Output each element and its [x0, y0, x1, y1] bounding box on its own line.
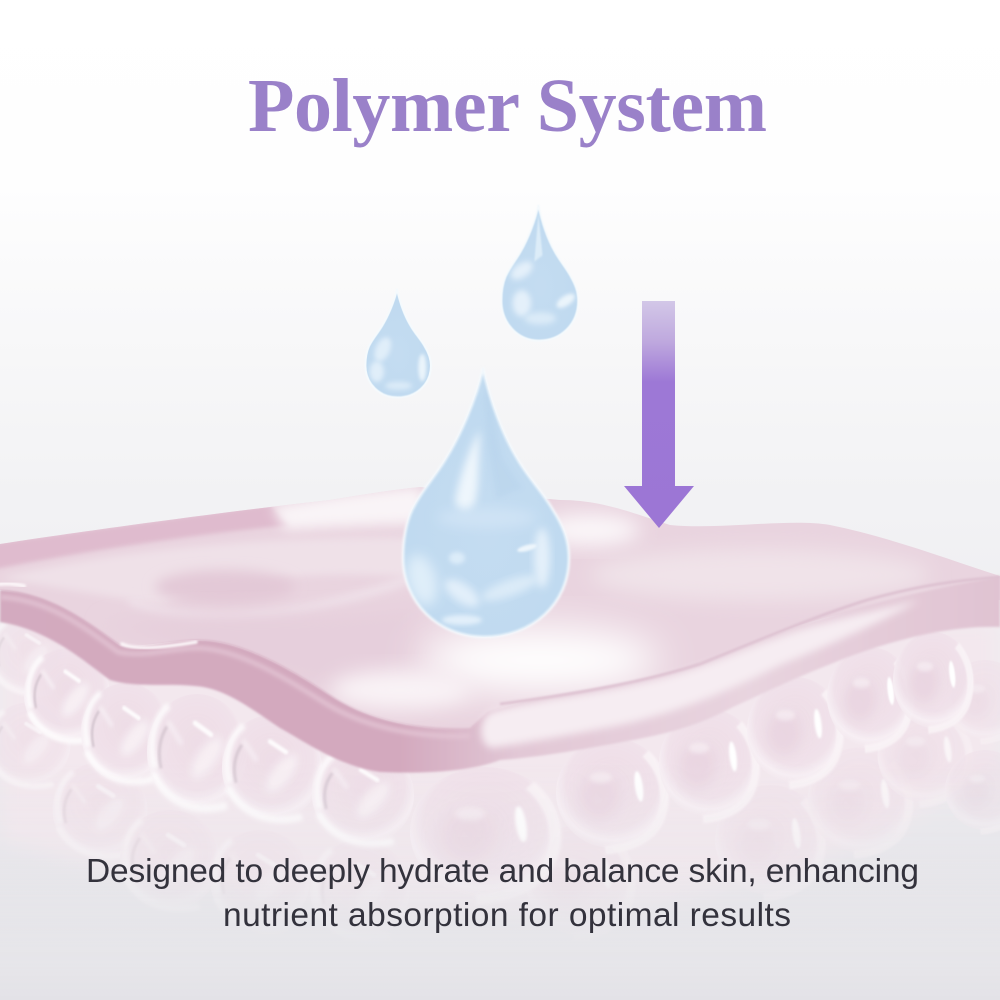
membrane front band [0, 577, 1000, 773]
back row of faded spheres [0, 615, 1000, 940]
membrane top surface [0, 487, 1000, 730]
icon: large water drop [402, 368, 572, 638]
fade over lower spheres [0, 760, 1000, 1000]
fade over lowest sphere edges [0, 860, 1000, 1000]
icon: medium water drop [501, 205, 580, 341]
front row of spheres [24, 632, 973, 900]
pink membrane [0, 487, 1000, 773]
band white inner strip [481, 600, 920, 748]
pink haze behind spheres [0, 620, 1000, 914]
icon: small water drop [365, 289, 432, 398]
arrow pointing down [624, 301, 694, 528]
band highlight strokes [0, 584, 196, 648]
description text [86, 853, 919, 934]
spheres layer [0, 615, 1000, 940]
surface shading [0, 487, 930, 710]
title: Polymer System [248, 64, 767, 148]
band upper soft highlight [0, 597, 470, 736]
description line 1: Designed to deeply hydrate and balance skin, enhancing [86, 853, 919, 890]
description line 2: nutrient absorption for optimal results [223, 897, 791, 934]
